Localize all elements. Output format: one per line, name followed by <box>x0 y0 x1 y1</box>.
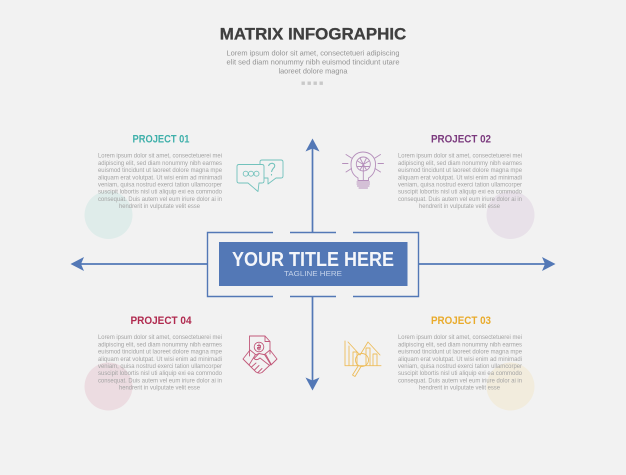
text block: project 02: hendrerit in vulputate velit esse <box>419 203 500 210</box>
panel: project 02 <box>342 133 522 210</box>
icon: handshake with invoice <box>243 336 277 373</box>
panel: project 01 <box>98 133 283 210</box>
text block: project 02: aliquam erat volutpat. Ut wisi enim ad minimadi <box>398 174 522 181</box>
heading: project 02: PROJECT 02 <box>431 133 491 145</box>
circle: project 03 <box>486 362 534 410</box>
center title box: TAGLINE HERE <box>284 269 342 278</box>
panel: project 04 <box>98 315 277 392</box>
subtitle: elit sed diam nonummy nibh euismod tincidunt utare <box>226 58 400 66</box>
text block: project 01: hendrerit in vulputate velit esse <box>119 203 200 210</box>
icon: speech bubbles <box>237 160 283 192</box>
text block: project 02 <box>398 153 522 210</box>
circle: project 02 <box>486 191 534 239</box>
heading: project 01: PROJECT 01 <box>132 133 190 145</box>
arrow: down <box>306 296 320 390</box>
text block: project 03: veniam, quisa nostrud exerci tation ullamcorper <box>398 363 522 370</box>
arrow: up <box>306 138 320 232</box>
subtitle <box>226 48 400 76</box>
text block: project 01: euismod tincidunt ut laoreet dolore magna mpe <box>98 167 222 174</box>
text block: project 02: adipiscing elit, sed diam nonummy nibh earmes <box>398 160 522 167</box>
subtitle: laoreet dolore magna <box>278 66 348 76</box>
text block: project 03: Lorem ipsum dolor sit amet, consectetuerei mei <box>398 334 522 341</box>
text block: project 03: aliquam erat volutpat. Ut wisi enim ad minimadi <box>398 356 522 363</box>
text block: project 01: veniam, quisa nostrud exerci tation ullamcorper <box>98 182 222 188</box>
text block: project 03: adipiscing elit, sed diam nonummy nibh earmes <box>398 341 522 348</box>
text block: project 01: suscipit lobortis nisl uti aliquip exi ea commodo <box>98 189 222 196</box>
text block: project 04 <box>98 334 222 392</box>
text block: project 04: suscipit lobortis nisl uti aliquip exi ea commodo <box>98 370 222 377</box>
text block: project 01: Lorem ipsum dolor sit amet, consectetuerei mei <box>98 153 222 160</box>
text block: project 02: veniam, quisa nostrud exerci tation ullamcorper <box>398 182 522 188</box>
text block: project 04: euismod tincidunt ut laoreet dolore magna mpe <box>98 349 222 356</box>
text block: project 04: hendrerit in vulputate velit esse <box>119 385 200 392</box>
text block: project 04: consequat. Duis autem vel eum iriure dolor ai in <box>98 377 222 384</box>
title: MATRIX INFOGRAPHIC <box>220 25 406 43</box>
arrow: left <box>70 257 207 271</box>
arrow: right <box>419 257 556 271</box>
circle: project 01 <box>84 191 132 239</box>
heading: project 03: PROJECT 03 <box>431 315 491 327</box>
text block: project 04: Lorem ipsum dolor sit amet, consectetuerei mei <box>98 334 222 341</box>
text block: project 01 <box>98 153 222 210</box>
text block: project 04: veniam, quisa nostrud exerci tation ullamcorper <box>98 363 222 370</box>
center frame <box>208 232 418 296</box>
center title box <box>219 242 408 286</box>
text block: project 02: consequat. Duis autem vel eum iriure dolor ai in <box>398 196 522 203</box>
pagination dots <box>302 82 323 85</box>
text block: project 04: aliquam erat volutpat. Ut wisi enim ad minimadi <box>98 356 222 363</box>
text block: project 03 <box>398 334 522 392</box>
subtitle: Lorem ipsum dolor sit amet, consectetueri adipiscing <box>226 48 400 58</box>
text block: project 02: euismod tincidunt ut laoreet dolore magna mpe <box>398 167 522 174</box>
panel: project 03 <box>345 315 522 392</box>
text block: project 01: aliquam erat volutpat. Ut wisi enim ad minimadi <box>98 174 222 181</box>
text block: project 02: Lorem ipsum dolor sit amet, consectetuerei mei <box>398 153 522 160</box>
text block: project 03: consequat. Duis autem vel eum iriure dolor ai in <box>398 377 522 384</box>
text block: project 03: hendrerit in vulputate velit esse <box>419 385 500 392</box>
icon: light bulb <box>342 152 384 188</box>
center title box: YOUR TITLE HERE <box>232 249 394 271</box>
text block: project 04: adipiscing elit, sed diam nonummy nibh earmes <box>98 341 222 348</box>
text block: project 02: suscipit lobortis nisl uti aliquip exi ea commodo <box>398 189 522 196</box>
circle: project 04 <box>84 362 132 410</box>
text block: project 03: euismod tincidunt ut laoreet dolore magna mpe <box>398 349 522 356</box>
heading: project 04: PROJECT 04 <box>130 315 192 327</box>
text block: project 01: consequat. Duis autem vel eum iriure dolor ai in <box>98 196 222 203</box>
icon: chart with magnifier <box>345 341 381 376</box>
text block: project 03: suscipit lobortis nisl uti aliquip exi ea commodo <box>398 370 522 377</box>
text block: project 01: adipiscing elit, sed diam nonummy nibh earmes <box>98 160 222 167</box>
